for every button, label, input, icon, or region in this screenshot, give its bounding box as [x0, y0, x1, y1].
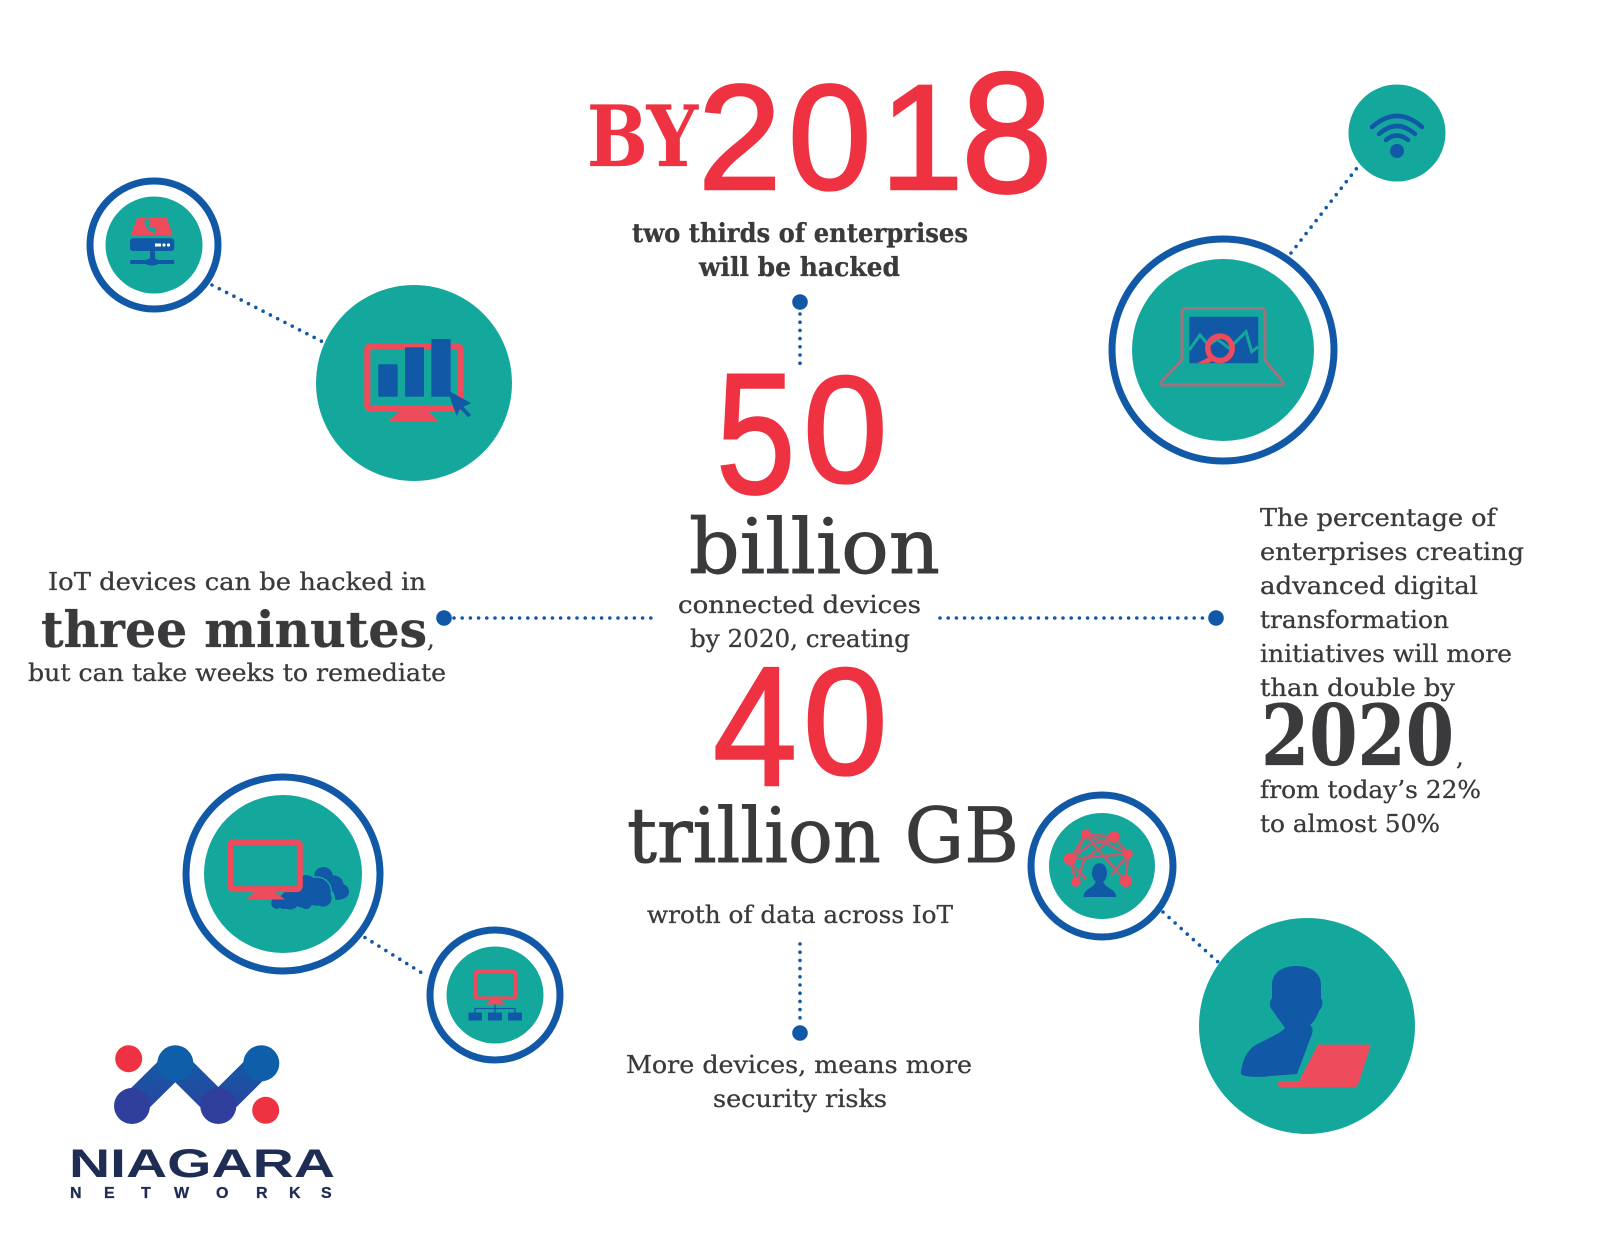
text block: digital transformation: The percentage of	[1260, 504, 1498, 532]
number: 40: 4	[713, 632, 797, 822]
number: 40	[713, 632, 888, 822]
icon: user with laptop	[1199, 918, 1415, 1134]
text block: digital transformation: ,	[1456, 743, 1464, 771]
text block: three minutes: IoT devices can be hacked in	[48, 568, 426, 596]
heading: trillion GB: trillion GB	[627, 791, 1019, 880]
text block: digital transformation: enterprises creating	[1260, 538, 1524, 566]
text: more devices, more security risks	[626, 1051, 972, 1113]
text: more devices, more security risks: security risks	[713, 1085, 887, 1113]
logo tagline: NETWORKS	[70, 1185, 332, 1202]
icon: monitor with network	[430, 930, 560, 1060]
text block: digital transformation	[1260, 504, 1524, 838]
text block: digital transformation: advanced digital	[1260, 572, 1478, 600]
number: 50: 0	[803, 345, 888, 515]
icon: wifi	[1348, 84, 1446, 182]
number: 40: 0	[803, 637, 888, 807]
text block: three minutes	[28, 568, 446, 687]
text block: three minutes: ,	[427, 625, 435, 653]
title number: 2018	[698, 36, 1053, 229]
logo wordmark: NIAGARA	[69, 1142, 335, 1186]
text block: digital transformation: initiatives will more	[1260, 640, 1512, 668]
number: 50: 5	[716, 338, 795, 530]
connector: left horizontal dotted line	[436, 610, 653, 626]
title word: BY: BY	[587, 87, 699, 186]
text: connected devices by 2020, creating: by 2020, creating	[690, 625, 910, 653]
text block: digital transformation: transformation	[1260, 606, 1449, 634]
connector: server to chart	[212, 285, 327, 344]
text block: digital transformation: from today’s 22%	[1260, 776, 1481, 804]
logo: Niagara Networks	[69, 1045, 335, 1202]
text block: digital transformation: to almost 50%	[1260, 810, 1440, 838]
text: wroth of data across IoT: wroth of data across IoT	[647, 901, 953, 929]
text block: three minutes: but can take weeks to remediate	[28, 659, 446, 687]
icon: server with phone	[90, 181, 218, 309]
text: connected devices by 2020, creating	[678, 591, 921, 653]
heading: billion: billion	[689, 502, 940, 591]
connector: wifi to laptop	[1291, 164, 1360, 253]
title: by 2018	[587, 36, 1053, 229]
icon: monitor with bar chart	[316, 285, 512, 481]
title number: 2018: 201	[698, 53, 963, 221]
title number: 2018: 8	[961, 36, 1053, 229]
text: more devices, more security risks: More devices, means more	[626, 1051, 972, 1079]
text block: digital transformation: 2020	[1261, 686, 1454, 785]
icon: person under network	[1031, 795, 1173, 937]
text block: three minutes: three minutes	[41, 600, 427, 659]
text: connected devices by 2020, creating: connected devices	[678, 591, 921, 619]
connector: top vertical dotted line	[792, 294, 808, 366]
subtitle: two thirds of enterprises: two thirds of enterprises	[632, 219, 968, 249]
icon: laptop with magnifier	[1112, 239, 1334, 461]
subtitle: two thirds of enterprises	[632, 219, 968, 283]
connector: right horizontal dotted line	[940, 610, 1224, 626]
logo mark	[114, 1045, 279, 1124]
connector: bottom vertical dotted line	[792, 944, 808, 1041]
connector: network person to laptop user	[1163, 912, 1218, 962]
icon: monitor with clouds	[186, 777, 380, 971]
subtitle: two thirds of enterprises: will be hacked	[698, 253, 900, 283]
number: 50	[716, 338, 888, 530]
connector: cloud to network monitor	[365, 938, 428, 976]
text block: digital transformation: than double by	[1260, 674, 1455, 702]
